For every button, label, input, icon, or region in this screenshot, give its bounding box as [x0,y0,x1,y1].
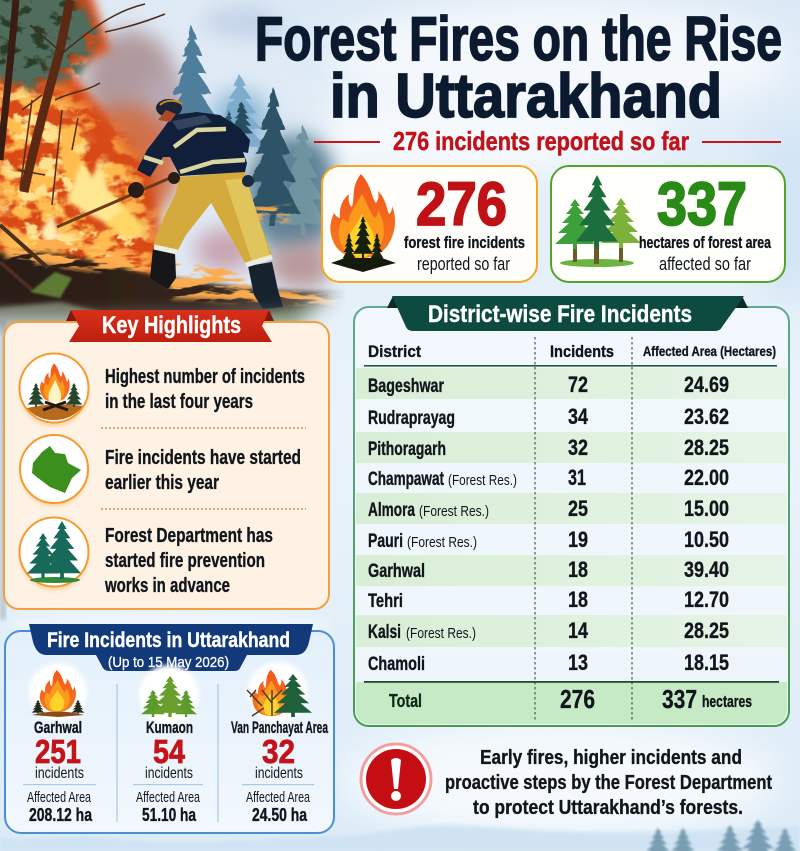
text: fire prevention: Forest Department has [105,525,273,547]
row: Almora: 15.00 [684,496,729,521]
row: Bageshwar: Bageshwar [368,376,444,397]
column: Kumaon: 54 [153,733,186,770]
caption: reported so far [417,254,510,274]
row: Rudraprayag [368,404,729,429]
row: Almora [368,496,729,521]
column: Van Panchayat Area: 32 [262,733,295,770]
text: fire prevention: works in advance [104,575,230,597]
icon: Uttarakhand map [20,435,88,506]
row: Almora: 25 [568,496,588,521]
stat card: forest area [551,166,785,282]
blue background firs [245,135,345,255]
row: Champawat: Champawat [368,469,444,490]
banner: fire incidents in Uttarakhand [29,624,313,671]
row: Tehri: 12.70 [684,587,729,612]
row: Kalsi [368,618,729,643]
row: Chamoli: Chamoli [368,654,425,675]
row: Pauri: 19 [568,527,588,552]
mist hills and fir silhouettes at bottom [644,820,799,851]
row: Champawat: (Forest Res.) [448,472,517,489]
row: Pithoragarh [368,435,729,460]
icon: flame with trees [330,174,396,272]
column: Van Panchayat Area: Affected Area [246,789,310,806]
foreground trees [0,0,84,82]
row: Tehri: 18 [568,587,588,612]
subtitle: 276 incidents reported so far [393,126,689,156]
callout: Early fires, higher incidents and [480,747,742,769]
icon: fir trees [20,518,88,590]
banner: fire incidents in Uttarakhand: (Up to 15 May 2026) [108,654,229,671]
text: highest number: in the last four years [105,391,253,413]
text: started earlier: Fire incidents have started [105,447,301,469]
row: Garhwal: Garhwal [368,561,425,582]
row: Pithoragarh: 32 [568,435,588,460]
number 337: 337 [657,170,747,238]
stat card: fire incidents [322,166,537,282]
row: Garhwal: 18 [568,557,588,582]
row: Almora: (Forest Res.) [419,503,489,520]
row: Kalsi: 28.25 [684,618,729,643]
row: Champawat [368,465,729,490]
column: Van Panchayat Area: incidents [255,765,303,782]
icon: exclamation [361,744,431,814]
text: started earlier [105,447,301,494]
icon: campfire [29,663,87,721]
banner: key highlights: Key Highlights [102,312,241,339]
panel: key highlights [4,310,329,609]
row: Champawat: 31 [568,465,586,490]
banner: fire incidents in Uttarakhand: Fire Incidents in Uttarakhand [47,629,290,652]
row: Chamoli [368,650,729,675]
row: Tehri [368,587,729,612]
row: Pauri: 10.50 [684,527,729,552]
row: Almora: Almora [368,500,415,521]
caption: affected so far [659,254,751,274]
row: Bageshwar: 72 [568,372,588,397]
column: Van Panchayat Area [231,662,328,825]
column: Kumaon: Affected Area [136,789,200,806]
text: highest number [105,366,305,413]
banner: district-wise fire incidents [387,296,748,331]
column: Garhwal: Garhwal [34,718,82,737]
ground [0,248,343,314]
row: Bageshwar: 24.69 [684,372,729,397]
text: fire prevention [104,525,273,597]
row: Garhwal: 39.40 [684,557,729,582]
column: Garhwal: Affected Area [27,789,91,806]
column: Kumaon [133,665,203,825]
callout: to protect Uttarakhand’s forests. [473,797,743,819]
row: Champawat: 22.00 [684,465,729,490]
title: in Uttarakhand [330,62,722,131]
text: fire prevention: started fire prevention [105,550,265,572]
panel: fire incidents in Uttarakhand [5,624,334,833]
smoke [85,30,175,130]
row: Pauri [368,527,729,552]
column: Garhwal: 251 [35,733,81,770]
column: Garhwal: 208.12 ha [29,805,93,825]
caption: forest fire incidents [404,233,525,252]
column: Garhwal [23,663,96,825]
row: Kalsi: Kalsi [368,622,401,643]
row: Tehri: Tehri [368,591,403,612]
icon: burning and green tree [247,662,312,722]
column: Kumaon: incidents [145,765,193,782]
row: Total: 276 [560,684,595,714]
table row bands [356,368,787,724]
column: Kumaon: Kumaon [146,718,193,737]
icon: three trees [555,175,641,267]
row: Chamoli: 13 [568,650,588,675]
row: Pithoragarh: Pithoragarh [368,439,446,460]
row: Pauri: (Forest Res.) [407,534,477,551]
row: Garhwal [368,557,729,582]
row: Kalsi: (Forest Res.) [406,625,476,642]
row: Chamoli: 18.15 [684,650,729,675]
column: Garhwal: incidents [35,765,84,782]
row: Kalsi: 14 [568,618,589,643]
icon: campfire [20,354,88,426]
table header [368,342,776,361]
table header: District [368,342,421,361]
title [255,5,782,131]
photo: firefighter battling forest fire [0,0,350,335]
column: Kumaon: 51.10 ha [142,805,197,825]
row: Rudraprayag: 34 [568,404,589,429]
row: Pithoragarh: 28.25 [684,435,729,460]
banner: district-wise fire incidents: District-wise Fire Incidents [428,301,692,328]
row: Total: Total [389,691,422,711]
text: highest number: Highest number of incidents [105,366,305,388]
table header: Incidents [550,342,614,361]
number 276: 276 [416,170,507,238]
text: started earlier: earlier this year [105,472,219,494]
fire mass [0,0,170,290]
icon: green trees [139,665,199,725]
row: Pauri: Pauri [368,531,403,552]
row: Total: 337 [662,684,697,714]
row: Rudraprayag: 23.62 [684,404,729,429]
row: Total [389,684,752,714]
row: Bageshwar [368,372,729,397]
caption [639,233,771,274]
banner: key highlights [66,310,274,342]
column: Van Panchayat Area: Van Panchayat Area [231,718,328,737]
callout [361,744,772,819]
column: Van Panchayat Area: 24.50 ha [252,805,308,825]
row: Rudraprayag: Rudraprayag [368,408,455,429]
panel: district-wise table [354,296,789,726]
row: Total: hectares [702,692,752,711]
pink mist low right [195,228,255,272]
firefighter [57,99,283,309]
caption [404,233,525,274]
